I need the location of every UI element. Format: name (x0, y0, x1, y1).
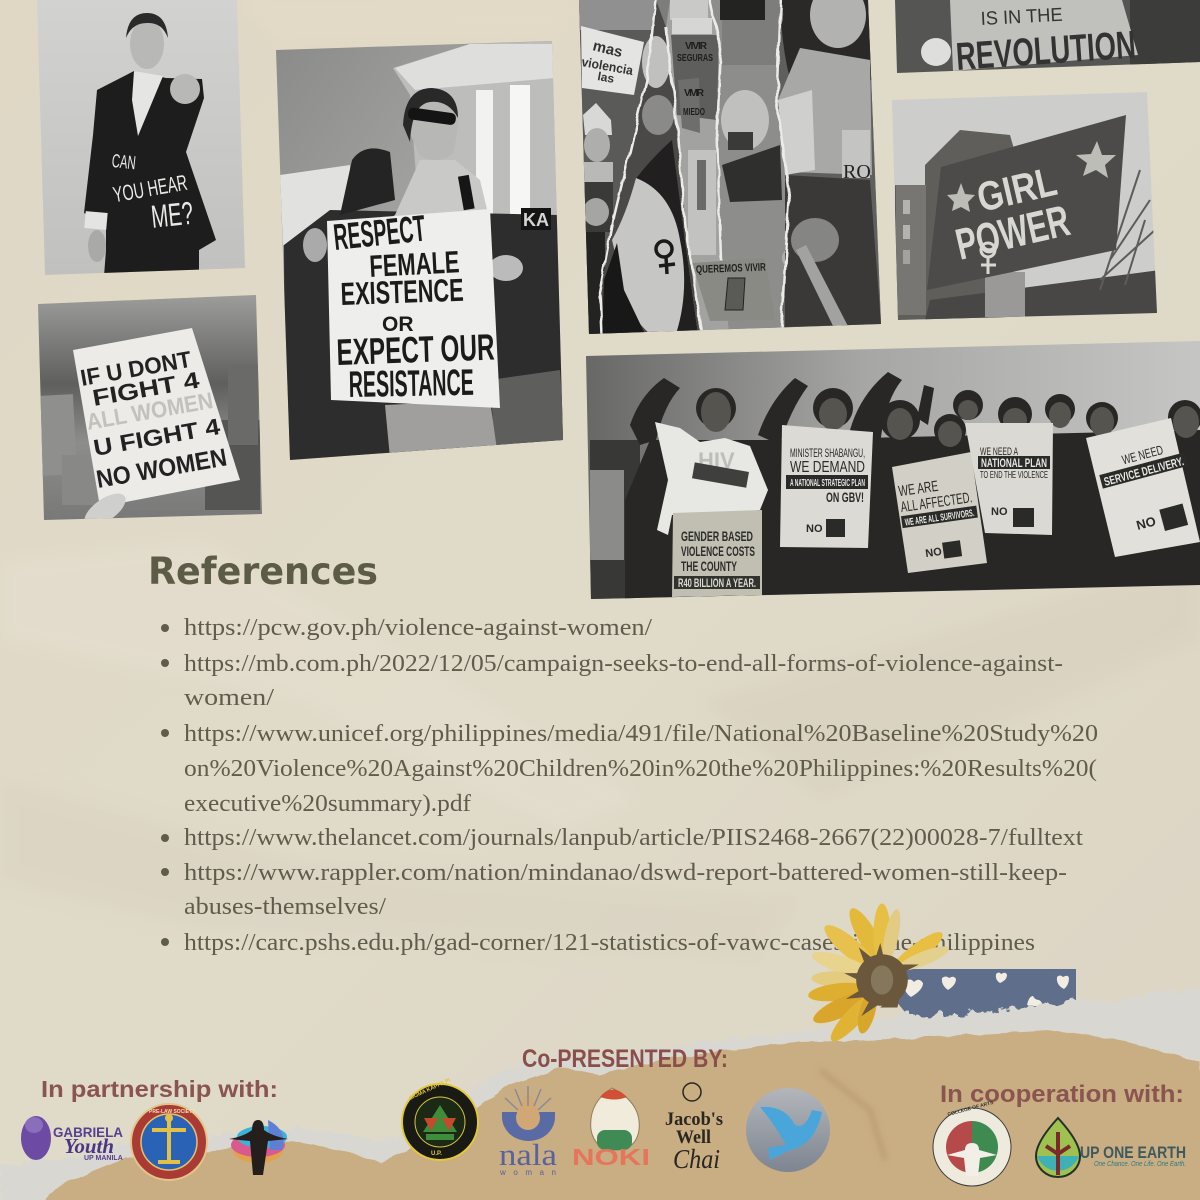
logo: Jacob's Well Chai: Jacob's (665, 1109, 723, 1130)
sign: gender based violence: VIOLENCE COSTS (681, 543, 755, 559)
logo: Gabriela Youth UP Manila: Youth (64, 1134, 114, 1158)
protest sign: ALL WOMEN (84, 387, 215, 435)
logo: Sigma Kappa Pi Fraternity: SIGMA KAPPA PI (408, 1077, 452, 1102)
collage strip: girl on right: RO (843, 161, 871, 183)
photo: torn collage of protesters (575, 0, 885, 340)
reference list: https://www.unicef.org/philippines/media/491/file/National%20Baseline%20Study%20 (184, 721, 1098, 747)
logo: CAS Student Council (933, 1100, 1011, 1186)
protest sign: IS IN THE (980, 5, 1063, 30)
jacket text: ME? (149, 195, 195, 235)
logo: silhouette with rainbow (229, 1120, 288, 1175)
reference list: https://pcw.gov.ph/violence-against-women/ (184, 615, 652, 641)
sign: we are all affected (892, 452, 987, 573)
collage strip: girl on right (777, 0, 885, 340)
collage strip: left: mas (591, 37, 624, 61)
woman in HIV Positive t-shirt: HIV (698, 448, 735, 473)
reference list: women/ (184, 685, 274, 711)
collage strip: signs: VIVIR (685, 41, 708, 52)
heading: References: References (148, 550, 378, 593)
collage strip: fists (692, 0, 785, 330)
protest sign: EXISTENCE (340, 272, 464, 312)
photo: Girl Power (888, 90, 1163, 325)
protesters: KA (523, 210, 549, 230)
logo: Sigma Kappa Pi Fraternity: U.P. (431, 1151, 442, 1157)
flower: pressed yellow daisy (807, 903, 951, 1046)
torn white paper edge (0, 988, 1200, 1200)
reference list: executive%20summary).pdf (184, 791, 471, 817)
woman in HIV Positive t-shirt (655, 422, 768, 535)
kraft paper band (35, 1030, 1200, 1200)
protest sign: EXPECT OUR (336, 327, 495, 373)
protest sign: U FIGHT 4 (91, 413, 222, 461)
washi tape with hearts (895, 969, 1076, 1030)
logo: Gabriela Youth UP Manila (21, 1116, 123, 1162)
logo: dove circle (746, 1088, 830, 1172)
logo: Jacob's Well Chai: Well (676, 1127, 711, 1148)
sign: minister shabangu: WE DEMAND (790, 459, 865, 476)
photo: If u dont fight 4 all women (38, 295, 262, 520)
logo: Noki: NOKI (572, 1144, 650, 1170)
collage strip: signs: VIVIR (684, 88, 705, 99)
faces (701, 392, 1199, 447)
logo: UP Manila Pre-Law Society seal: PRE-LAW SOCIETY (149, 1109, 196, 1115)
sign: we need service delivery: NO (1135, 513, 1157, 533)
sign: we need a national plan: WE NEED A (980, 446, 1018, 458)
sign: minister shabangu: ON GBV! (826, 489, 864, 505)
protest sign: RESISTANCE (348, 362, 474, 405)
reference list: on%20Violence%20Against%20Children%20in%20the%20Philippines:%20Results%20( (184, 756, 1097, 782)
collage strip: left: violencia (580, 54, 635, 78)
logo: UP Manila Pre-Law Society seal (131, 1104, 207, 1180)
protest sign: RESPECT (332, 208, 428, 258)
logo: Sigma Kappa Pi Fraternity (402, 1077, 478, 1160)
protest sign (950, 0, 1138, 71)
Girl Power sign: GIRL (973, 158, 1061, 221)
collage strip: fists: QUEREMOS VIVIR (696, 262, 766, 276)
protest sign (73, 328, 240, 507)
collage strip: signs: MIEDO (683, 107, 705, 118)
protest sign: FIGHT 4 (90, 367, 201, 411)
sign: we are all affected: NO (925, 546, 943, 560)
buildings and trees (895, 130, 1160, 320)
jacket text: YOU HEAR (111, 170, 189, 207)
collage strip: signs (666, 0, 730, 340)
collage strip: middle blurred face and profile (600, 0, 702, 340)
collage strip: left: las (596, 69, 616, 86)
protest sign (327, 208, 500, 408)
logo: Gabriela Youth UP Manila: GABRIELA (53, 1124, 123, 1140)
sign: we are all affected: WE ARE ALL SURVIVORS. (904, 508, 975, 529)
reference list (161, 615, 1098, 956)
collage strip: signs: SEGURAS (677, 53, 713, 64)
logo: Nala Woman: nala (499, 1137, 557, 1172)
sign: we are all affected: WE ARE (897, 478, 939, 500)
sign: gender based violence (672, 510, 762, 597)
sign: we need service delivery: WE NEED (1120, 442, 1165, 467)
figure: girl in black jacket (84, 13, 216, 276)
logo: Nala Woman (499, 1086, 557, 1177)
sign: minister shabangu (780, 425, 873, 548)
protest sign: OR (382, 313, 414, 336)
heading: Co-presented by: Co-PRESENTED BY: (522, 1045, 728, 1073)
sign: minister shabangu: MINISTER SHABANGU, (790, 446, 865, 460)
photo: is in the revolution (895, 0, 1200, 73)
sign: minister shabangu: A NATIONAL STRATEGIC PLAN (790, 478, 865, 489)
sign: we need a national plan: NATIONAL PLAN (981, 456, 1047, 470)
sign: we need a national plan (965, 423, 1053, 535)
sign: we are all affected: ALL AFFECTED. (900, 489, 973, 516)
heading: In partnership with: In partnership with: (41, 1076, 278, 1102)
Girl Power sign: POWER (951, 196, 1074, 270)
sign: gender based violence: GENDER BASED (681, 528, 753, 544)
torn paper edges (600, 0, 789, 335)
reference list: https://www.thelancet.com/journals/lanpub/article/PIIS2468-2667(22)00028-7/fulltext (184, 825, 1083, 851)
protest sign: FEMALE (369, 244, 460, 284)
logo: CAS Student Council: COLLEGE OF ARTS (947, 1100, 995, 1118)
courthouse building (280, 41, 560, 245)
sign: gender based violence: THE COUNTY (681, 558, 737, 574)
reference list: https://carc.pshs.edu.ph/gad-corner/121-statistics-of-vawc-cases-in-the-philippines (184, 930, 1035, 956)
sign: we need service delivery (1086, 418, 1200, 557)
photo: Respect female existence (270, 40, 570, 465)
logo: Noki (572, 1088, 650, 1170)
photo: group protest with No More signs (580, 335, 1200, 605)
protest sign: IF U DONT (78, 346, 193, 391)
sign: gender based violence: R40 BILLION A YEAR. (678, 576, 756, 590)
sign: we need a national plan: TO END THE VIOLENCE (980, 470, 1048, 481)
logo: Jacob's Well Chai: Chai (673, 1144, 720, 1174)
reference list: https://mb.com.ph/2022/12/05/campaign-seeks-to-end-all-forms-of-violence-against- (184, 651, 1063, 677)
female symbol on cheek (656, 241, 675, 274)
logo: UP One Earth: One Chance. One Life. One Earth. (1094, 1161, 1186, 1168)
protest sign: NO WOMEN (94, 443, 229, 494)
sign: we need a national plan: NO (991, 506, 1008, 518)
logo: UP One Earth (1036, 1118, 1186, 1177)
Girl Power sign (927, 115, 1126, 290)
crowd (625, 372, 1200, 600)
heading: In cooperation with: In cooperation with: (940, 1081, 1184, 1108)
logo: Jacob's Well Chai (665, 1083, 723, 1174)
jacket text: CAN (111, 151, 137, 174)
photo: Can you hear me (30, 0, 250, 280)
reference list: https://www.rappler.com/nation/mindanao/dswd-report-battered-women-still-keep- (184, 860, 1067, 886)
sign: minister shabangu: NO (806, 523, 823, 535)
collage strip: left (575, 0, 656, 340)
logo: Gabriela Youth UP Manila: UP MANILA (84, 1155, 123, 1162)
protesters (284, 88, 565, 465)
reference list: abuses-themselves/ (184, 894, 386, 920)
jacket text (112, 154, 192, 228)
logo: Nala Woman: woman (499, 1168, 556, 1177)
